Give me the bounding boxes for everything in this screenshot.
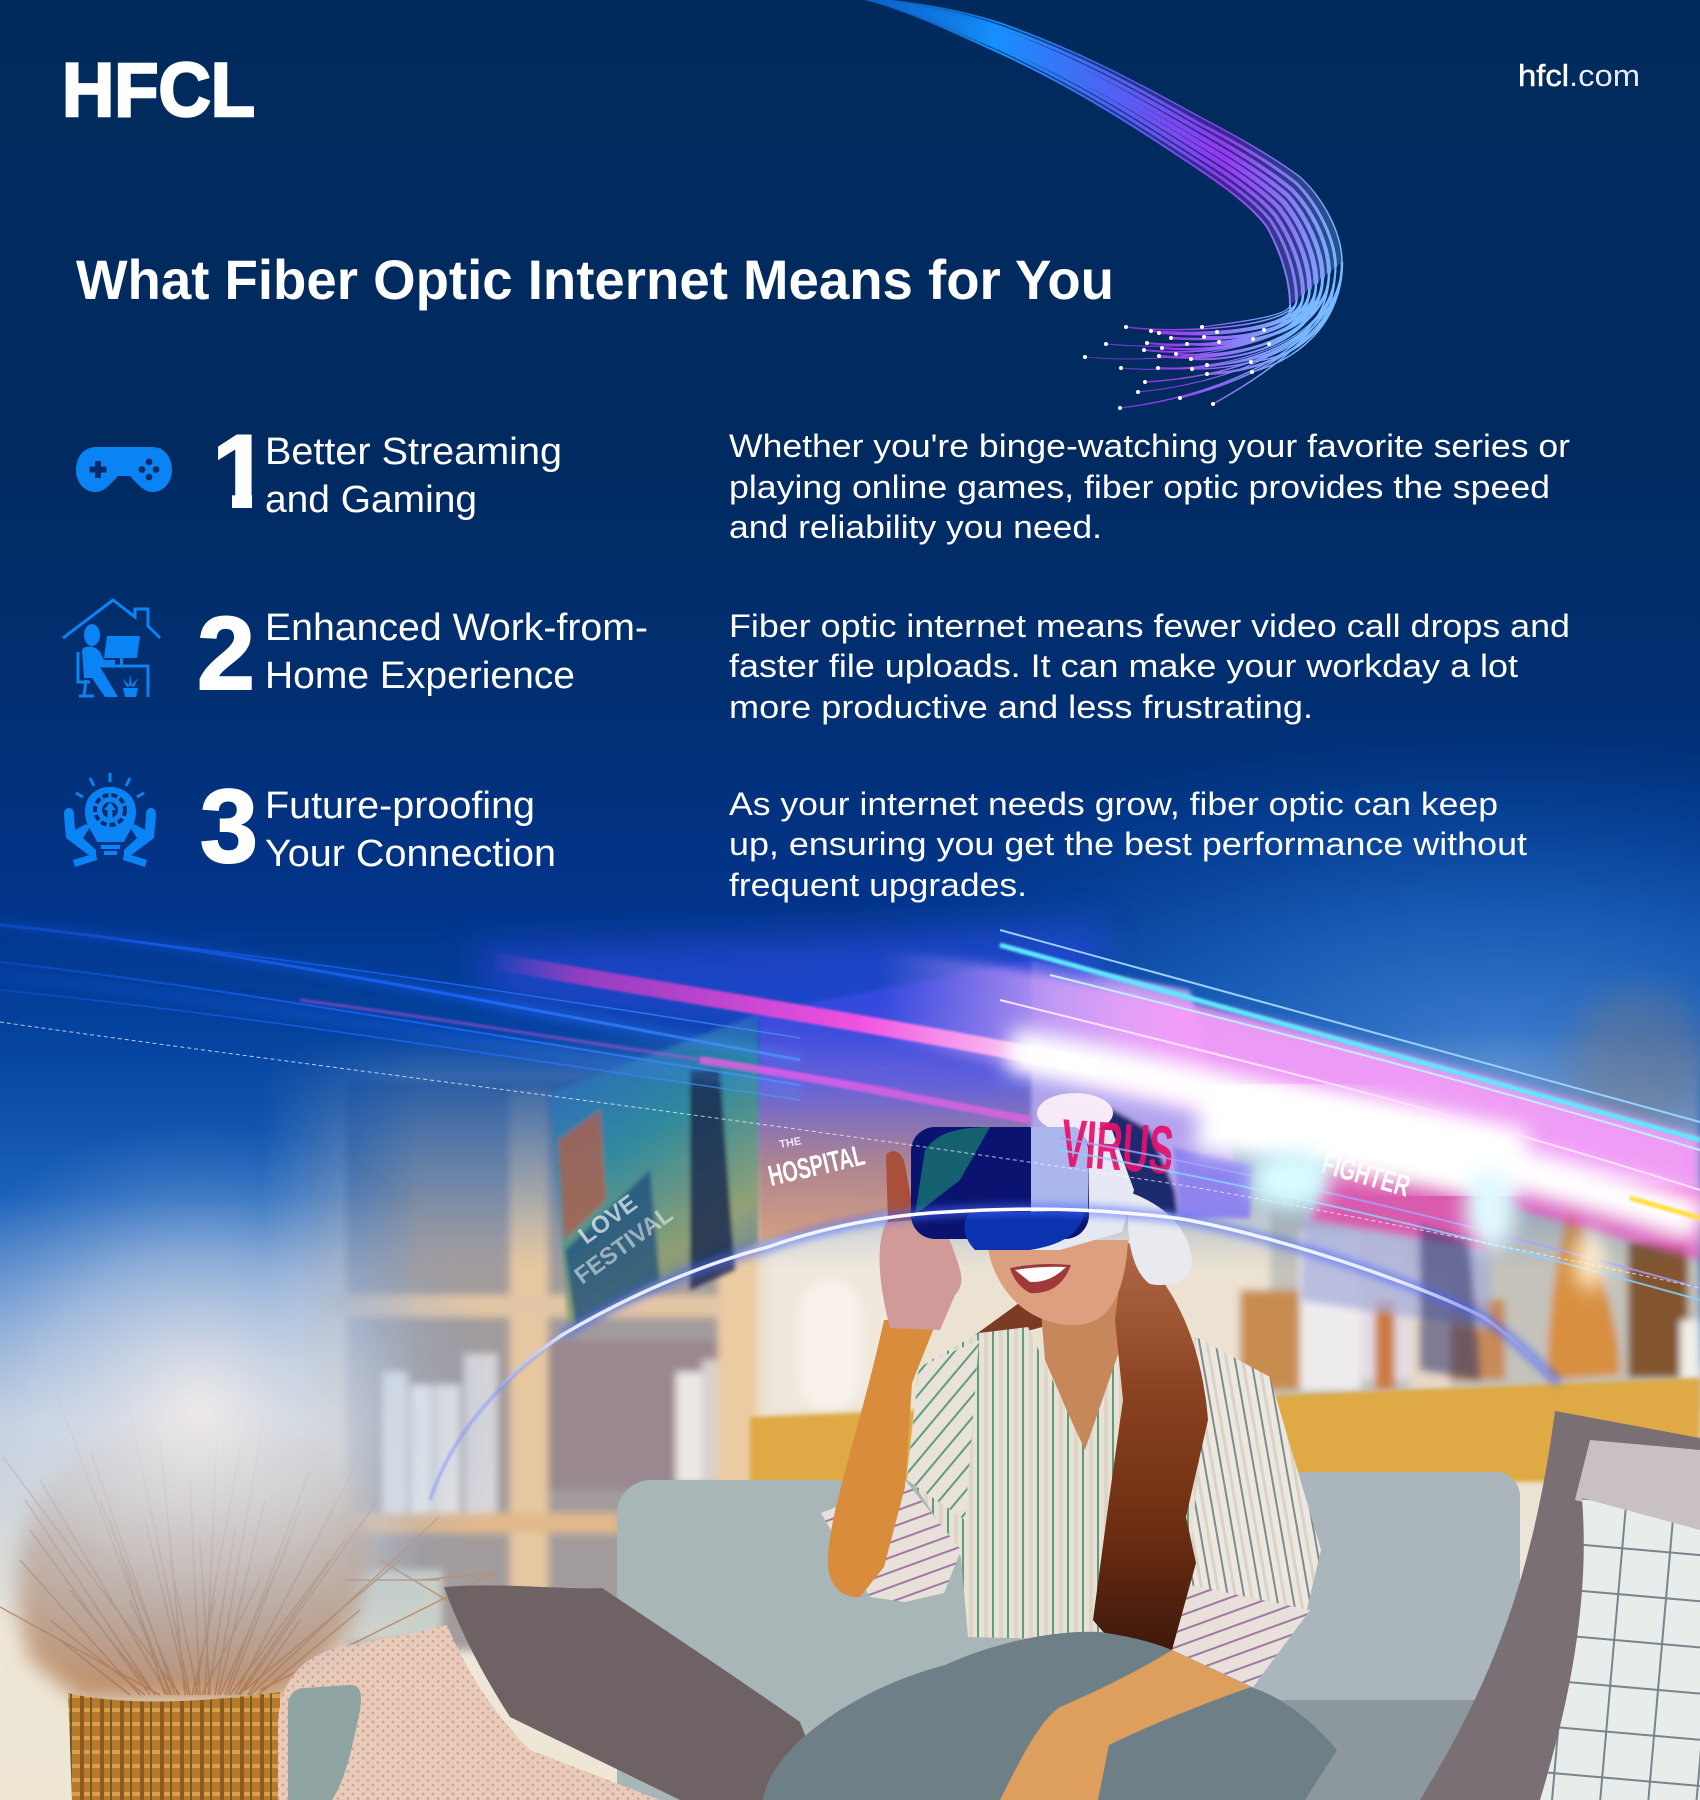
magenta thin band (490, 960, 1100, 1068)
description (729, 428, 1570, 545)
mauve pillow (444, 1585, 830, 1800)
face (987, 1240, 1128, 1325)
VR headset (911, 1093, 1192, 1285)
heading: Better Streaming (265, 431, 562, 473)
panel: floating movie screens (551, 960, 1490, 1380)
heading: Enhanced Work-from- (265, 607, 648, 649)
hair (1093, 1240, 1208, 1650)
gray furry pillow (763, 1632, 1337, 1800)
heading (265, 785, 556, 875)
icon: hands holding gear bulb (64, 773, 156, 867)
screen: fighter (1300, 1147, 1490, 1380)
white fade over left of room (0, 1120, 500, 1680)
screen: love festival (551, 1013, 759, 1330)
sofa (617, 1472, 1520, 1800)
blurred plant behind upper right (1570, 990, 1700, 1130)
heading (265, 607, 648, 697)
number 3: 3 (200, 769, 258, 885)
yellow line (1630, 1198, 1700, 1218)
screen: the hospital (759, 960, 1031, 1243)
raised arm (828, 1320, 937, 1597)
plant in basket (0, 1393, 495, 1800)
white core (1010, 1050, 1700, 1222)
item 2: enhanced work-from-home experience (63, 596, 1570, 725)
heading: Future-proofing (265, 785, 535, 827)
wooden cabinet (750, 1378, 1700, 1490)
number 1: 1 (212, 414, 270, 530)
title: What Fiber Optic Internet Means for You (76, 248, 1114, 311)
blue lines on the left (0, 925, 1030, 1120)
fiber optic strands (861, 0, 1342, 410)
description: and reliability you need. (729, 509, 1102, 545)
hair behind neck (975, 1295, 1050, 1338)
screen: the hospital: HOSPITAL (765, 1140, 868, 1193)
website link: hfcl (1518, 58, 1569, 93)
website link: .com (1569, 58, 1640, 93)
neck (1040, 1290, 1125, 1452)
description: faster file uploads. It can make your workday a lot (729, 648, 1518, 684)
magenta lower band (1480, 1170, 1700, 1260)
description: Fiber optic internet means fewer video call drops and (729, 608, 1570, 644)
raised finger (886, 1151, 915, 1222)
description: more productive and less frustrating. (729, 689, 1313, 725)
screen: virus backdrop (1031, 960, 1253, 1220)
lens glow (1251, 1150, 1604, 1290)
description: frequent upgrades. (729, 867, 1027, 903)
screen: the hospital: THE (778, 1135, 802, 1151)
VIRUS poster title: VIRUS (1059, 1105, 1176, 1189)
description: Whether you're binge-watching your favorite series or (729, 428, 1570, 464)
screen: love festival: LOVE (574, 1190, 642, 1250)
icon: game controller (76, 447, 172, 492)
dashed line (0, 1022, 1700, 1288)
description: As your internet needs grow, fiber optic can keep (729, 786, 1498, 822)
shirt (821, 1327, 1321, 1687)
website link (1518, 58, 1640, 93)
screen: love festival: FESTIVAL (570, 1201, 678, 1290)
description: playing online games, fiber optic provides the speed (729, 469, 1550, 505)
magenta wide band (880, 950, 1700, 1225)
glowing arc (430, 1209, 1559, 1500)
heading (265, 431, 562, 521)
icon: person working at home (63, 600, 160, 697)
hand (880, 1217, 961, 1330)
armrest (288, 1685, 361, 1800)
description (729, 786, 1527, 903)
logo: HFCL: HFCL (62, 48, 255, 133)
number 2: 2 (197, 596, 255, 712)
blue glow (470, 925, 1100, 1060)
item 3: future-proofing your connection (64, 769, 1527, 903)
heading: and Gaming (265, 479, 477, 521)
description (729, 608, 1570, 725)
woman (821, 1093, 1321, 1687)
right pillows (1420, 1411, 1700, 1800)
screen: fighter: FIGHTER (1318, 1147, 1414, 1204)
blanket over armrest (278, 1625, 660, 1800)
heading: Home Experience (265, 655, 575, 697)
room background: shelves, cabinet and books (240, 1000, 1700, 1650)
description: up, ensuring you get the best performance without (729, 826, 1527, 862)
fiber fan to tips (1085, 262, 1342, 408)
item 1: better streaming and gaming (76, 434, 1570, 544)
heading: Your Connection (265, 833, 556, 875)
fiber tip dots (1083, 325, 1271, 410)
forearm on pillow (1000, 1650, 1251, 1800)
light streaks (0, 925, 1700, 1300)
cyan light lines (1000, 930, 1700, 1300)
fiber band (861, 0, 1342, 305)
basket (68, 1692, 280, 1800)
